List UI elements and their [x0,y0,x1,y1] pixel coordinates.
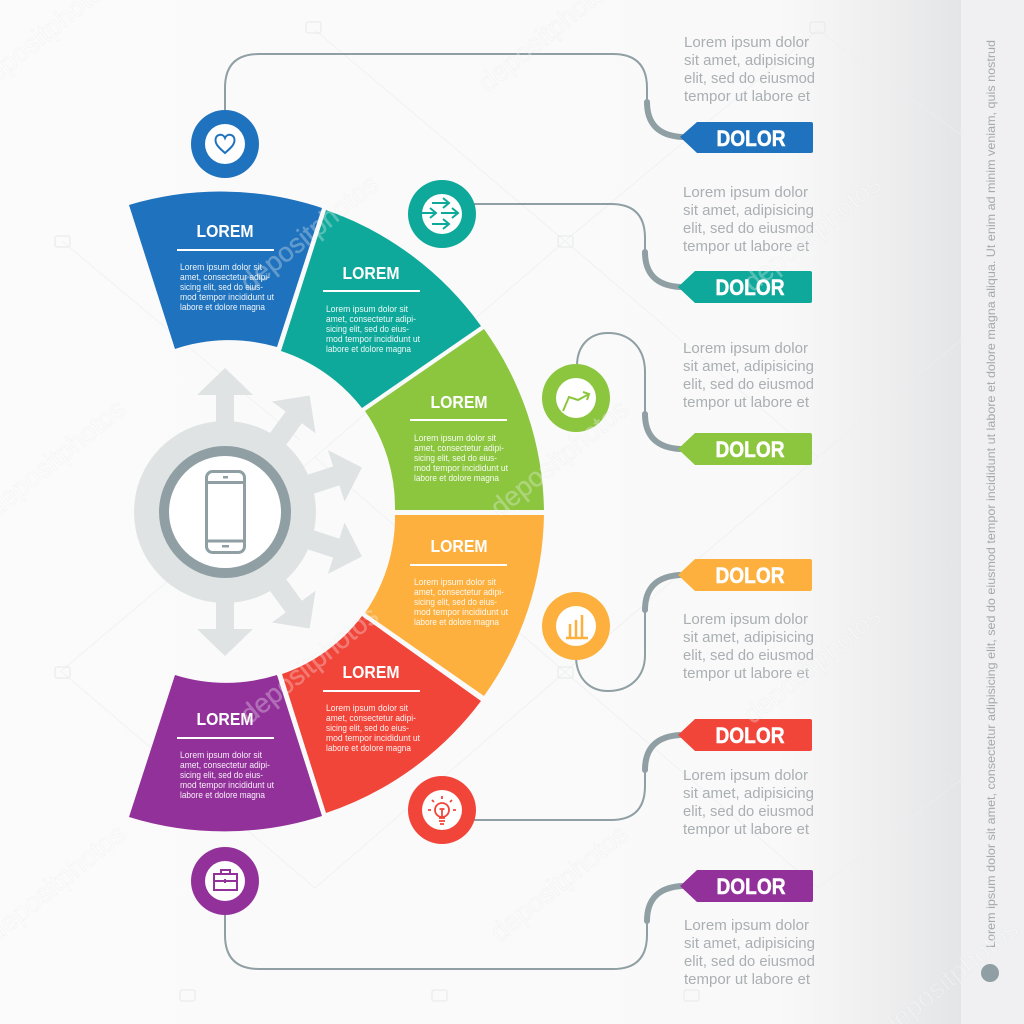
text block: teal: tempor ut labore et [683,239,809,255]
icon: bar chart badge [542,592,610,660]
text block: Lorem ipsum dolor sit [326,703,408,714]
text block: labore et dolore magna [180,790,266,801]
hub outer circle [134,421,316,603]
heading: LOREM [196,221,254,241]
panel: orange segment [365,515,544,696]
text block: green: tempor ut labore et [683,395,809,411]
text block: teal [683,185,814,255]
text block: sicing elit, sed do eius- [326,723,409,734]
tag: orange [678,559,812,591]
text block: purple: tempor ut labore et [684,972,810,988]
text block: teal: sit amet, adipisicing [683,203,814,219]
panel: purple segment [129,675,322,831]
text block: blue: Lorem ipsum dolor [684,35,809,51]
right side strip [961,0,1024,1024]
text block [414,433,508,484]
tag: blue [680,122,813,153]
text block [180,262,274,313]
text block: green [683,341,814,411]
text block: sicing elit, sed do eius- [326,324,409,335]
watermark: depositphotos [235,168,384,298]
watermark: depositphotos [738,600,887,730]
text block: orange: sit amet, adipisicing [683,630,814,646]
text block: blue [684,35,815,105]
text block: Lorem ipsum dolor sit [180,262,262,273]
text block: purple [684,918,815,988]
tag: purple: DOLOR [716,874,786,899]
text block: sicing elit, sed do eius- [180,282,263,293]
text block: mod tempor incididunt ut [180,780,274,791]
text block [326,703,420,754]
connector: purple [225,886,682,969]
text block: teal: Lorem ipsum dolor [683,185,808,201]
text block: blue: tempor ut labore et [684,89,810,105]
text block: mod tempor incididunt ut [414,607,508,618]
arrow up [197,368,253,440]
connector: blue [225,54,682,137]
text block: orange: tempor ut labore et [683,666,809,682]
text block: orange [683,612,814,682]
watermark: depositphotos [235,600,384,730]
text block: green: elit, sed do eiusmod [683,377,814,393]
icon: arrows badge [408,180,476,248]
arrow 144 degrees [245,554,331,644]
heading: LOREM [342,662,400,682]
text block: labore et dolore magna [326,743,412,754]
text block: red: sit amet, adipisicing [683,786,814,802]
text block: red: elit, sed do eiusmod [683,804,814,820]
text block: red [683,768,814,838]
text block: labore et dolore magna [180,302,266,313]
text block: blue: sit amet, adipisicing [684,53,815,69]
panel: blue segment [129,192,322,349]
connector: green [577,333,680,449]
icon: smartphone [206,472,244,552]
panel: green segment [365,329,544,510]
text block: amet, consectetur adipi- [414,587,504,598]
text block: green: sit amet, adipisicing [683,359,814,375]
arrow 108 degrees [285,509,370,582]
text block: labore et dolore magna [414,617,500,628]
text block: amet, consectetur adipi- [326,314,416,325]
text block: teal: elit, sed do eiusmod [683,221,814,237]
tag: red [678,719,812,751]
text block: amet, consectetur adipi- [326,713,416,724]
text block: orange: Lorem ipsum dolor [683,612,808,628]
tag: purple [680,870,813,902]
icon: heart badge [191,110,259,178]
connector: teal [474,204,680,287]
text block: amet, consectetur adipi- [180,760,270,771]
side dot [981,964,999,982]
tag: red: DOLOR [716,723,785,748]
watermark: depositphotos [485,393,634,523]
text block: sicing elit, sed do eius- [180,770,263,781]
arrow 72 degrees [285,442,370,515]
panel: red segment [282,616,481,813]
text block: green: Lorem ipsum dolor [683,341,808,357]
icon: light bulb badge [408,776,476,844]
text block: sicing elit, sed do eius- [414,453,497,464]
text block: Lorem ipsum dolor sit [326,304,408,315]
text block [414,577,508,628]
text block: Lorem ipsum dolor sit [180,750,262,761]
hub arrows and circle [134,368,370,656]
heading: LOREM [196,709,254,729]
icon: briefcase badge [191,847,259,915]
connector: orange [576,575,680,691]
text block: blue: elit, sed do eiusmod [684,71,815,87]
arrow down [197,584,253,656]
text block: red: tempor ut labore et [683,822,809,838]
text block: mod tempor incididunt ut [414,463,508,474]
icon: growth arrow badge [542,364,610,432]
text block: Lorem ipsum dolor sit [414,433,496,444]
heading: LOREM [342,263,400,283]
text block: purple: elit, sed do eiusmod [684,954,815,970]
text block: labore et dolore magna [326,344,412,355]
text block: Lorem ipsum dolor sit [414,577,496,588]
text block: amet, consectetur adipi- [180,272,270,283]
text block: purple: sit amet, adipisicing [684,936,815,952]
tag: green: DOLOR [716,437,785,462]
vertical side text: Lorem ipsum dolor sit amet, consectetur adipisicing elit, sed do eiusmod tempor incididunt ut labore et dolore magna aliqua. Ut enim ad minim veniam, quis nostrud [984,40,998,948]
tag: teal: DOLOR [716,275,785,300]
heading: LOREM [430,392,488,412]
connector: red [474,735,680,820]
text block: purple: Lorem ipsum dolor [684,918,809,934]
tag: blue: DOLOR [716,126,786,151]
text block: sicing elit, sed do eius- [414,597,497,608]
text block [180,750,274,801]
text block: red: Lorem ipsum dolor [683,768,808,784]
panel: teal segment [281,210,481,408]
text block: mod tempor incididunt ut [326,334,420,345]
heading: LOREM [430,536,488,556]
tag: green [678,433,812,465]
watermark: depositphotos [738,168,887,298]
tag: teal [678,271,812,303]
text block [326,304,420,355]
arrow 36 degrees [245,380,331,470]
text block: mod tempor incididunt ut [180,292,274,303]
text block: amet, consectetur adipi- [414,443,504,454]
watermark: depositphotos [485,818,634,948]
text block: orange: elit, sed do eiusmod [683,648,814,664]
text block: mod tempor incididunt ut [326,733,420,744]
text block: labore et dolore magna [414,473,500,484]
hub ring [164,451,286,573]
tag: orange: DOLOR [716,563,785,588]
